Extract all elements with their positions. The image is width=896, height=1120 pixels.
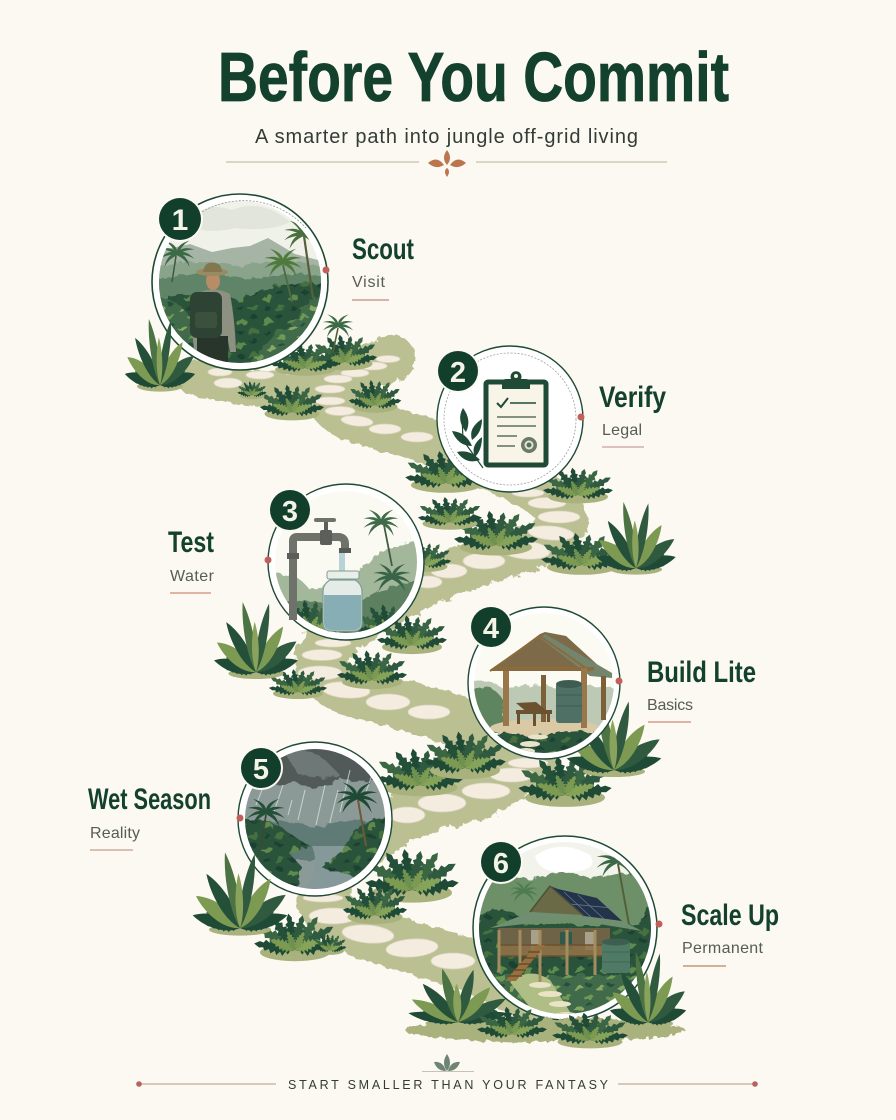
icon: clipboard checklist bbox=[486, 371, 546, 465]
label Water: Water bbox=[170, 568, 215, 585]
connector dot bbox=[578, 414, 584, 420]
icon: house bbox=[490, 886, 642, 982]
number badge 2: 2 bbox=[450, 357, 466, 389]
fern plant beside step 5 bbox=[192, 851, 289, 936]
connector dot bbox=[322, 266, 330, 274]
underline bbox=[90, 849, 133, 851]
number badge 3: 3 bbox=[282, 496, 298, 528]
icon: stairs bbox=[505, 945, 545, 981]
underline bbox=[683, 965, 726, 967]
fern plant beside step 1 bbox=[124, 318, 196, 392]
ring 6 bbox=[473, 836, 657, 1020]
footer bbox=[136, 1054, 758, 1092]
illustration: tap filling a water jar bbox=[275, 491, 417, 633]
winding jungle path bbox=[195, 358, 564, 995]
icon: water jar bbox=[323, 553, 362, 631]
fern plant beside step 2 bbox=[595, 501, 677, 575]
connector dot bbox=[656, 920, 662, 928]
panel: step 2 Verify bbox=[436, 346, 666, 492]
number badge 5: 5 bbox=[253, 754, 269, 786]
panel: step 6 Scale Up bbox=[473, 836, 779, 1020]
dashed inner ring bbox=[188, 201, 306, 228]
label Legal: Legal bbox=[602, 422, 642, 439]
heading Verify: Verify bbox=[599, 381, 666, 414]
panel: step 3 Test bbox=[168, 484, 425, 643]
illustration: hiker overlooking the jungle bbox=[159, 201, 321, 363]
label Basics: Basics bbox=[647, 697, 693, 714]
ring 2 bbox=[437, 346, 583, 492]
heading Scale Up: Scale Up bbox=[681, 899, 779, 932]
icon: rain tank bbox=[556, 680, 582, 723]
panel: step 1 Scout bbox=[150, 190, 414, 380]
number badge 1 bbox=[157, 196, 203, 242]
illustration: permanent jungle home bbox=[475, 838, 655, 1020]
illustration: open-sided shelter with water tank bbox=[474, 613, 614, 753]
number badge 1: 1 bbox=[172, 204, 188, 237]
icon: footer leaf bbox=[422, 1054, 474, 1072]
footer tagline: START SMALLER THAN YOUR FANTASY bbox=[288, 1078, 609, 1092]
heading Scout: Scout bbox=[352, 233, 414, 266]
number badge 3 bbox=[268, 488, 312, 532]
icon: faucet bbox=[287, 518, 351, 620]
ring 5 bbox=[238, 742, 392, 896]
icon: bench bbox=[516, 702, 552, 726]
heading Wet Season: Wet Season bbox=[88, 783, 211, 816]
connector dot bbox=[616, 678, 622, 684]
panel: step 4 Build Lite bbox=[468, 605, 756, 760]
ring 1 bbox=[152, 194, 328, 370]
header divider with flower ornament bbox=[226, 150, 667, 177]
icon: shelter bbox=[490, 632, 612, 728]
number badge 6: 6 bbox=[493, 848, 509, 880]
ring 3 bbox=[268, 484, 424, 640]
label Reality: Reality bbox=[90, 825, 140, 842]
fern plant beside step 3 bbox=[213, 601, 299, 679]
number badge 2 bbox=[436, 349, 480, 393]
number badge 5 bbox=[239, 746, 283, 790]
connector dot bbox=[264, 556, 272, 564]
underline bbox=[170, 592, 211, 594]
connector dot bbox=[236, 814, 244, 822]
footer rule with dots bbox=[136, 1081, 758, 1087]
number badge 6 bbox=[479, 840, 523, 884]
heading Build Lite: Build Lite bbox=[647, 656, 756, 689]
icon: leaf sprig bbox=[452, 408, 483, 468]
icon: rain tank bbox=[602, 938, 630, 973]
underline bbox=[648, 721, 691, 723]
illustration: rain over a jungle river bbox=[245, 749, 385, 889]
dashed inner ring bbox=[444, 353, 576, 485]
label Permanent: Permanent bbox=[682, 940, 764, 957]
underline bbox=[352, 299, 389, 301]
underline bbox=[602, 446, 644, 448]
fern plant beside step 4 bbox=[566, 699, 663, 777]
stepping stones bbox=[208, 356, 580, 969]
number badge 4: 4 bbox=[483, 613, 499, 645]
label Visit: Visit bbox=[352, 274, 386, 291]
hiker bbox=[192, 289, 236, 368]
number badge 4 bbox=[469, 605, 513, 649]
foreground plants around step 6 bbox=[405, 951, 687, 1048]
ring 4 bbox=[468, 607, 620, 759]
heading Test: Test bbox=[168, 526, 214, 559]
subtitle: A smarter path into jungle off-grid living bbox=[255, 126, 638, 148]
foliage clumps along the path bbox=[237, 312, 624, 961]
panel: step 5 Wet Season bbox=[88, 742, 392, 896]
title: Before You Commit bbox=[218, 38, 729, 116]
